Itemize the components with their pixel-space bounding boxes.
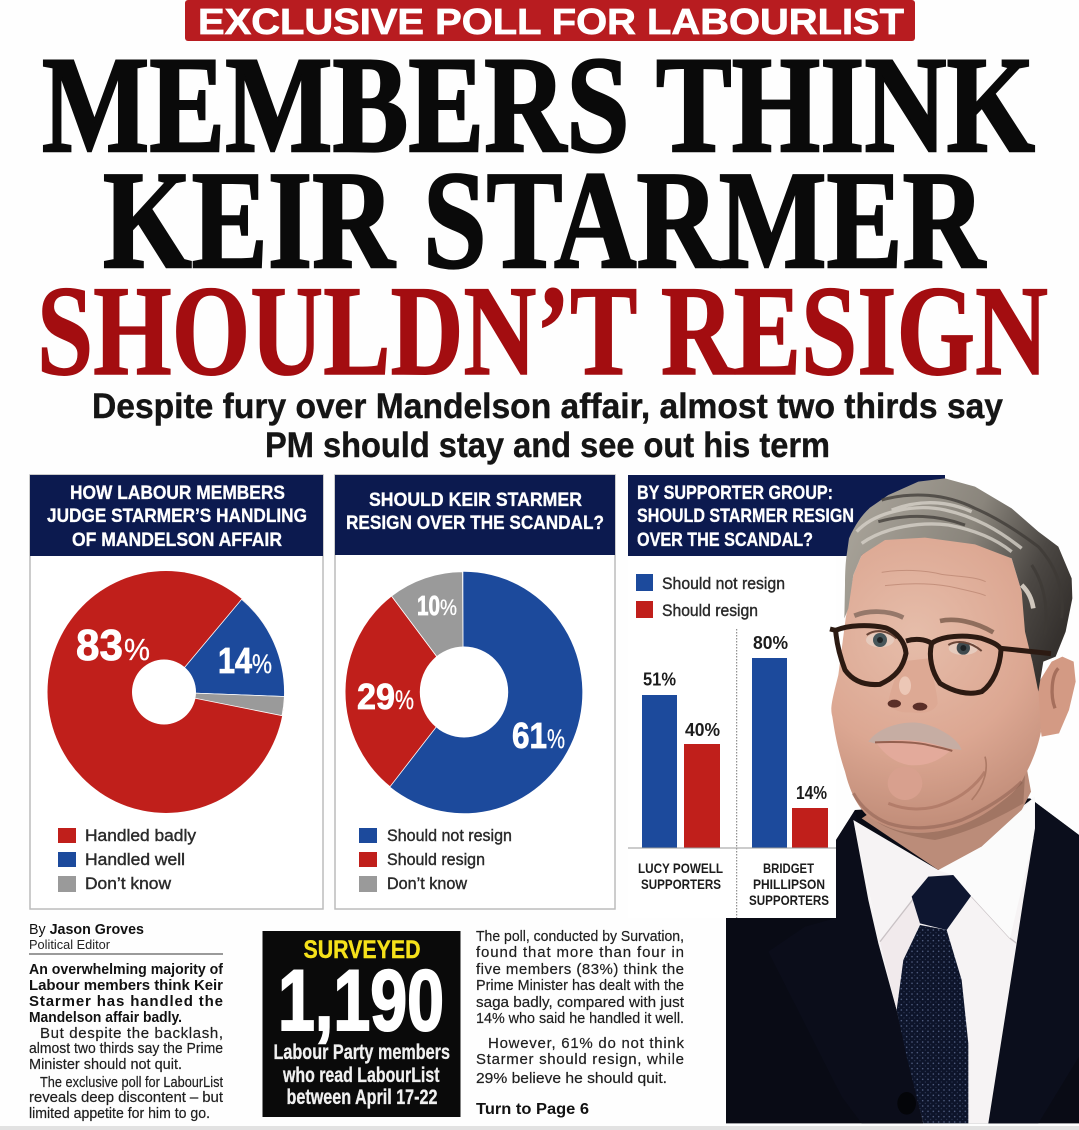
byline: [29, 922, 223, 955]
donut chart: resign: %: [440, 595, 457, 620]
jacket: [726, 798, 1079, 1123]
panel heading: supporter group: SHOULD STARMER RESIGN: [637, 506, 854, 527]
panel heading: handling: [30, 475, 323, 556]
moustache area: [868, 722, 962, 750]
callout: surveyed 1,190: [262, 931, 460, 1117]
page reference: Turn to Page 6: [476, 1101, 589, 1118]
legend: resign: Don’t know: [387, 875, 467, 893]
hair: [844, 478, 1072, 692]
panel heading: handling: JUDGE STARMER’S HANDLING: [47, 506, 307, 527]
ear: [1035, 657, 1076, 737]
legend: supporter group: [636, 574, 785, 620]
byline: By Jason Groves: [29, 922, 144, 938]
article column: right: 14% who said he handled it well.: [476, 1010, 684, 1027]
banner: exclusive poll: EXCLUSIVE POLL FOR LABOURLIST: [198, 1, 904, 42]
callout: surveyed 1,190: 1,190: [278, 953, 444, 1049]
neck: [862, 758, 1031, 870]
chin: [888, 767, 922, 800]
legend: handling: [58, 827, 197, 893]
donut chart: resign: %: [395, 685, 414, 715]
article column: left: Labour members think Keir: [29, 977, 223, 994]
legend: handling: Handled well: [85, 851, 185, 869]
pie chart: handling: 83: [76, 621, 123, 670]
bar chart: supporter group: PHILLIPSON: [753, 876, 825, 892]
glasses: [830, 626, 1051, 693]
bar chart: supporter group: SUPPORTERS: [641, 876, 721, 892]
pie chart: handling: %: [252, 649, 272, 679]
legend: resign: Should resign: [387, 851, 485, 869]
panel heading: handling: HOW LABOUR MEMBERS: [70, 483, 285, 504]
legend: resign: Should not resign: [387, 827, 512, 845]
legend: handling: Don’t know: [85, 875, 171, 893]
callout: surveyed 1,190: SURVEYED: [304, 936, 420, 964]
subheading: [92, 387, 1004, 465]
bar chart: supporter group: 40%: [685, 720, 720, 740]
bar chart: supporter group: SUPPORTERS: [749, 892, 829, 908]
bar chart: supporter group: LUCY POWELL: [638, 860, 723, 876]
panel: by supporter group: [628, 475, 945, 918]
forehead wrinkles: [882, 570, 986, 596]
collar: [853, 797, 1035, 942]
legend: handling: Handled badly: [85, 827, 197, 845]
panel heading: resign: RESIGN OVER THE SCANDAL?: [346, 513, 604, 534]
article column: left: But despite the backlash,: [40, 1025, 223, 1042]
article column: left: The exclusive poll for LabourList: [40, 1074, 224, 1091]
bar chart: supporter group: 14%: [796, 783, 827, 803]
face: [831, 537, 1041, 832]
legend: resign: [359, 827, 512, 893]
legend: supporter group: Should resign: [662, 602, 758, 620]
donut chart: resign: 29: [357, 676, 395, 717]
panel heading: resign: [335, 475, 615, 555]
article column: left: reveals deep discontent – but: [29, 1089, 224, 1106]
article column: left: limited appetite for him to go.: [29, 1105, 210, 1122]
panel: handling of Mandelson affair: [30, 475, 323, 909]
eyebrows: [854, 612, 903, 618]
subheading: Despite fury over Mandelson affair, almost two thirds say: [92, 387, 1004, 426]
article column: left: Minister should not quit.: [29, 1056, 182, 1073]
portrait: Keir Starmer: [726, 478, 1079, 1123]
bar chart: supporter group: BRIDGET: [763, 860, 814, 876]
donut chart: resign: [345, 572, 582, 813]
eyes: [866, 633, 894, 647]
shirt: [853, 797, 1035, 1123]
panel: should Starmer resign: [335, 475, 615, 909]
panel heading: resign: SHOULD KEIR STARMER: [369, 490, 582, 511]
article column: right: 29% believe he should quit.: [476, 1070, 667, 1087]
pie chart: handling: [48, 571, 284, 813]
bar chart: supporter group: 51%: [643, 670, 676, 690]
article column: right: saga badly, compared with just: [476, 994, 685, 1011]
legend: supporter group: Should not resign: [662, 575, 785, 593]
lips: [877, 740, 951, 765]
panel heading: handling: OF MANDELSON AFFAIR: [72, 530, 282, 551]
tie: [897, 925, 968, 1123]
panel heading: supporter group: BY SUPPORTER GROUP:: [637, 483, 833, 504]
article column: right: Prime Minister has dealt with the: [476, 977, 684, 994]
article column: right: [476, 928, 685, 1118]
donut chart: resign: %: [547, 724, 565, 754]
article column: right: However, 61% do not think: [488, 1035, 684, 1052]
bar chart: supporter group: 80%: [753, 633, 788, 653]
article column: left: An overwhelming majority of: [29, 961, 224, 978]
bottom edge: [0, 1126, 1079, 1130]
article column: right: The poll, conducted by Survation,: [476, 928, 684, 945]
headline: [37, 28, 1048, 402]
article column: left: Starmer has handled the: [29, 993, 223, 1010]
donut chart: resign: 61: [512, 715, 547, 756]
bar chart: supporter group: [628, 629, 836, 918]
pie chart: handling: 14: [218, 640, 252, 681]
article column: right: five members (83%) think the: [476, 961, 684, 978]
callout: surveyed 1,190: between April 17-22: [286, 1086, 438, 1109]
panel heading: supporter group: OVER THE SCANDAL?: [637, 530, 813, 551]
callout: surveyed 1,190: Labour Party members: [274, 1041, 450, 1064]
article column: left: Mandelson affair badly.: [29, 1009, 182, 1026]
byline: Political Editor: [29, 937, 111, 952]
article column: left: almost two thirds say the Prime: [29, 1040, 223, 1057]
callout: surveyed 1,190: who read LabourList: [282, 1064, 440, 1087]
article column: right: Starmer should resign, while: [476, 1051, 684, 1068]
subheading: PM should stay and see out his term: [265, 426, 830, 465]
pie chart: handling: %: [124, 632, 150, 667]
jacket button: [897, 1092, 916, 1115]
article column: left: [29, 961, 224, 1122]
nose: [888, 658, 938, 713]
panel heading: supporter group: [628, 475, 945, 556]
article column: right: found that more than four in: [476, 944, 684, 961]
donut chart: resign: 10: [417, 590, 440, 621]
